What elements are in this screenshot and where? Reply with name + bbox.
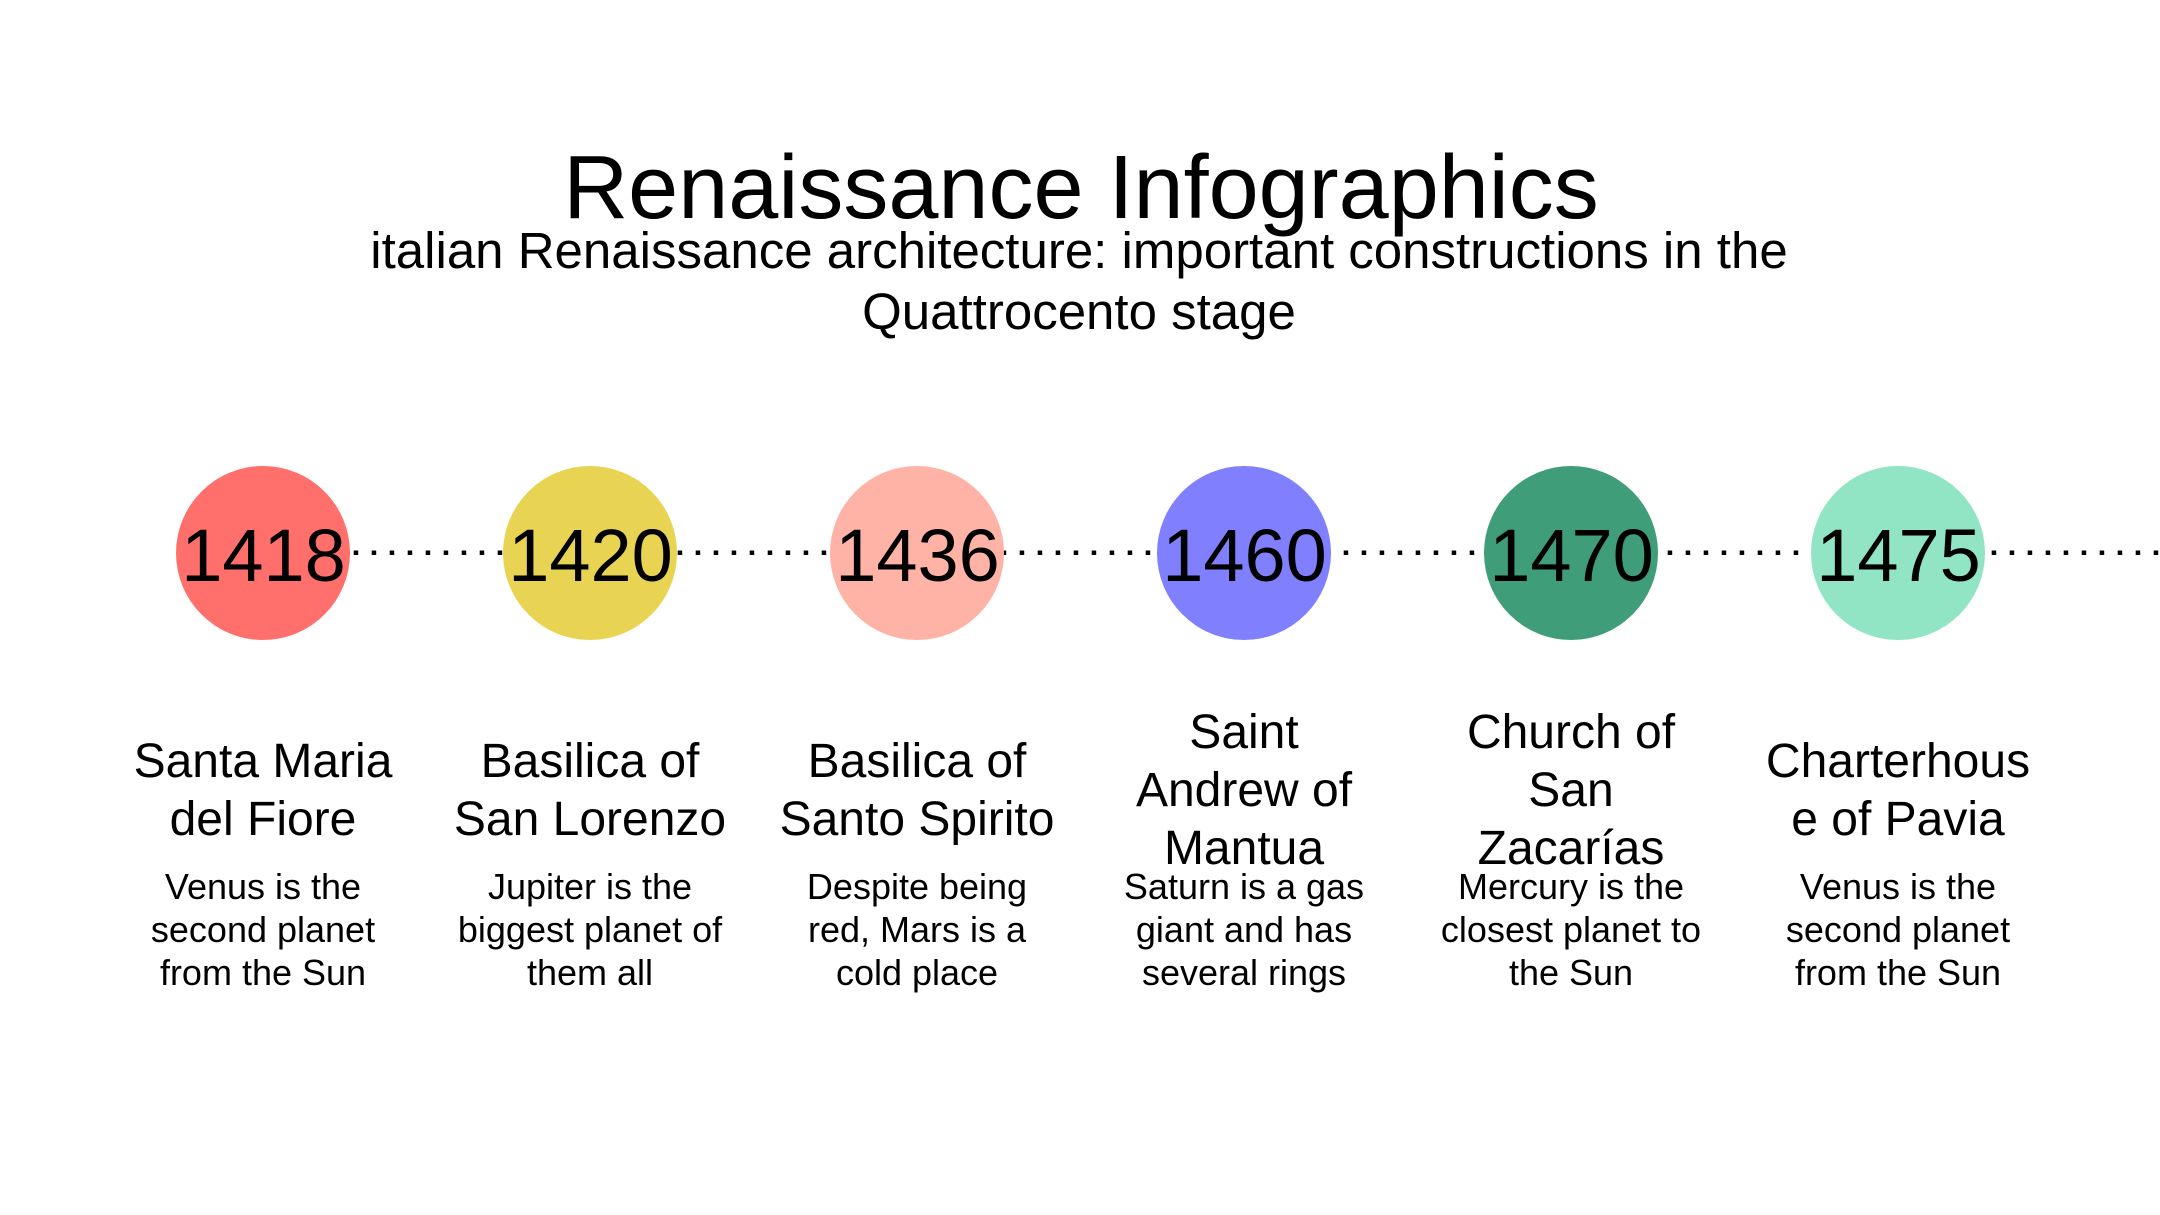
heading: Church of San Zacarías xyxy=(1467,706,1676,874)
text: Venus description 2: Venus is the xyxy=(1800,866,1996,907)
text: Saturn description: several rings xyxy=(1142,952,1346,993)
heading: Church of San Zacarías: Church of xyxy=(1467,706,1675,758)
heading: Charterhouse of Pavia: e of Pavia xyxy=(1791,792,2005,846)
text: Saturn description: Saturn is a gas xyxy=(1124,866,1364,907)
circle: 1436: 1436 xyxy=(835,514,1000,597)
subtitle xyxy=(370,222,1788,340)
text: Venus description: Venus is the xyxy=(165,866,361,907)
circle: 1418: 1418 xyxy=(181,514,346,597)
text: Mars description: Despite being xyxy=(807,866,1027,907)
heading: Church of San Zacarías: Zacarías xyxy=(1478,822,1664,874)
text: Venus description 2: from the Sun xyxy=(1795,952,2001,993)
text: Saturn description xyxy=(1124,866,1364,993)
heading: Santa Maria del Fiore xyxy=(134,734,392,846)
heading: Saint Andrew of Mantua: Saint xyxy=(1189,706,1299,758)
text: Venus description xyxy=(151,866,375,993)
text: Jupiter description: Jupiter is the xyxy=(488,866,692,907)
text: Saturn description: giant and has xyxy=(1136,909,1352,950)
subtitle: Quattrocento stage xyxy=(862,283,1296,340)
heading: Santa Maria del Fiore: del Fiore xyxy=(170,792,356,846)
text: Mars description xyxy=(807,866,1027,993)
heading: Charterhouse of Pavia xyxy=(1766,734,2030,846)
text: Jupiter description: them all xyxy=(527,952,653,993)
heading: Basilica of San Lorenzo: San Lorenzo xyxy=(454,792,726,846)
text: Mercury description: the Sun xyxy=(1509,952,1633,993)
circle: 1470: 1470 xyxy=(1489,514,1654,597)
text: Mars description: cold place xyxy=(836,952,998,993)
circle: 1436 xyxy=(830,466,1004,640)
heading: Saint Andrew of Mantua: Andrew of xyxy=(1136,764,1352,816)
heading: Saint Andrew of Mantua: Mantua xyxy=(1164,822,1324,874)
heading: Basilica of Santo Spirito: Basilica of xyxy=(808,734,1026,788)
circle: 1470 xyxy=(1484,466,1658,640)
text: Mars description: red, Mars is a xyxy=(808,909,1026,950)
circle: 1460 xyxy=(1157,466,1331,640)
heading: Church of San Zacarías: San xyxy=(1528,764,1614,816)
title: Renaissance Infographics xyxy=(563,138,1599,238)
text: Mercury description: Mercury is the xyxy=(1458,866,1684,907)
heading: Basilica of San Lorenzo xyxy=(454,734,726,846)
text: Jupiter description xyxy=(458,866,722,993)
heading: Basilica of Santo Spirito: Santo Spirito xyxy=(780,792,1054,846)
circle: 1475: 1475 xyxy=(1816,514,1981,597)
circle: 1420 xyxy=(503,466,677,640)
heading: Santa Maria del Fiore: Santa Maria xyxy=(134,734,392,788)
subtitle: italian Renaissance architecture: important constructions in the xyxy=(370,222,1788,279)
heading: Saint Andrew of Mantua xyxy=(1136,706,1352,874)
heading: Charterhouse of Pavia: Charterhous xyxy=(1766,734,2030,788)
text: Venus description: second planet xyxy=(151,909,375,950)
text: Venus description 2: second planet xyxy=(1786,909,2010,950)
heading: Basilica of San Lorenzo: Basilica of xyxy=(481,734,699,788)
circle: 1418 xyxy=(176,466,350,640)
text: Jupiter description: biggest planet of xyxy=(458,909,722,950)
text: Venus description 2 xyxy=(1786,866,2010,993)
circle: 1475 xyxy=(1811,466,1985,640)
heading: Basilica of Santo Spirito xyxy=(780,734,1054,846)
text: Venus description: from the Sun xyxy=(160,952,366,993)
circle: 1460: 1460 xyxy=(1162,514,1327,597)
text: Mercury description xyxy=(1441,866,1701,993)
text: Mercury description: closest planet to xyxy=(1441,909,1701,950)
circle: 1420: 1420 xyxy=(508,514,673,597)
